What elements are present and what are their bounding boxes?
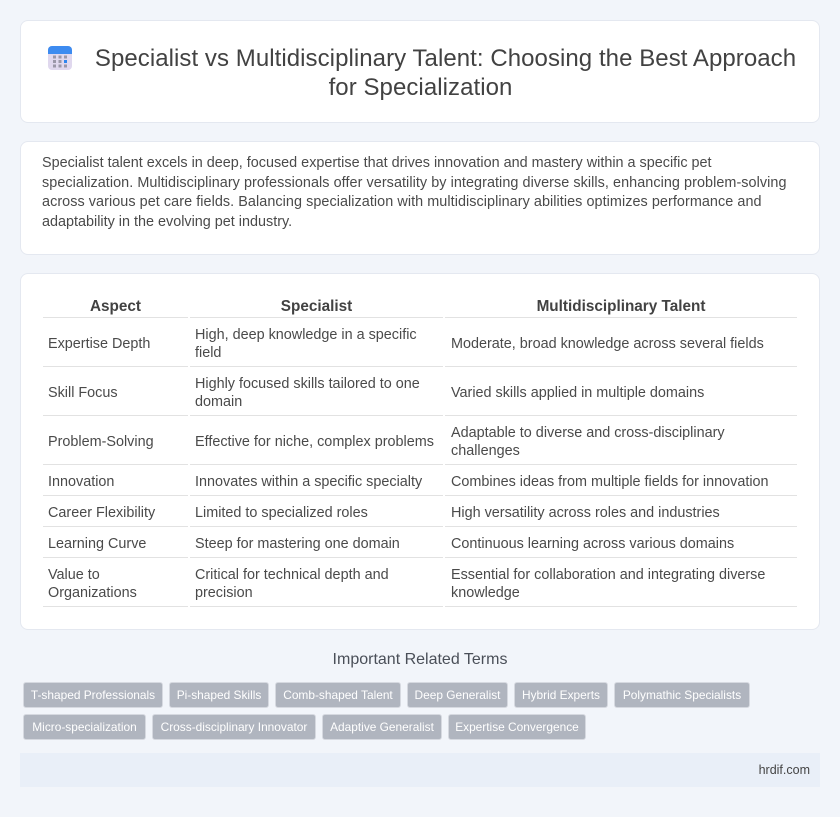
tags: related terms [23, 682, 750, 740]
comparison table: field [195, 345, 221, 361]
comparison table: knowledge [451, 585, 520, 601]
comparison table: Highly focused skills tailored to one [195, 376, 420, 392]
title: Specialist vs Multidisciplinary Talent: Choosing the Best Approach [95, 45, 796, 72]
panel: title card [20, 20, 820, 123]
row: Learning Curve: Learning Curve [48, 536, 146, 552]
row: Value to Organizations: Value to [48, 567, 100, 583]
tag: Cross-disciplinary Innovator [161, 720, 307, 734]
intro text [42, 155, 787, 230]
heading: related terms: Important Related Terms [333, 651, 507, 668]
tag: Adaptive Generalist [330, 720, 434, 734]
comparison table: High versatility across roles and industries [451, 505, 720, 521]
tag [23, 682, 163, 708]
tag [448, 714, 586, 740]
tag: Hybrid Experts [522, 688, 600, 702]
comparison table: challenges [451, 443, 520, 459]
comparison table: Varied skills applied in multiple domains [451, 385, 704, 401]
tag: T-shaped Professionals [31, 688, 155, 702]
intro text: across various pet care fields. Balancing specialization with multidisciplinary abilities optimizes performance and [42, 194, 762, 210]
comparison table: Moderate, broad knowledge across several fields [451, 336, 764, 352]
intro text: Specialist talent excels in deep, focused expertise that drives innovation and mastery within a specific pet [42, 155, 712, 171]
row: Value to Organizations: Organizations [48, 585, 137, 601]
tag: Pi-shaped Skills [177, 688, 261, 702]
icon: calendar [48, 46, 72, 70]
panel: intro text card [20, 141, 820, 255]
tag: Expertise Convergence [455, 720, 579, 734]
row: Problem-Solving: Problem-Solving [48, 434, 154, 450]
intro text: adaptability in the evolving pet industry. [42, 214, 292, 230]
tag: Polymathic Specialists [623, 688, 741, 702]
header: Multidisciplinary Talent: Multidisciplinary Talent [537, 298, 705, 315]
comparison table: domain [195, 394, 242, 410]
row: Skill Focus: Skill Focus [48, 385, 118, 401]
tag [407, 682, 508, 708]
row: Value to Organizations [48, 567, 137, 601]
panel: comparison table card [20, 273, 820, 630]
comparison table: Continuous learning across various domains [451, 536, 734, 552]
comparison table: Effective for niche, complex problems [195, 434, 434, 450]
title: for Specialization [329, 74, 512, 101]
header: Specialist: Specialist [281, 298, 352, 315]
tag: Deep Generalist [415, 688, 500, 702]
footer bar [20, 753, 820, 787]
tag [169, 682, 269, 708]
title [95, 45, 796, 101]
header: Aspect: Aspect [90, 298, 141, 315]
comparison table: Adaptable to diverse and cross-disciplinary [451, 425, 725, 441]
footer source: hrdif.com [759, 763, 810, 777]
comparison table: precision [195, 585, 253, 601]
comparison table: Combines ideas from multiple fields for innovation [451, 474, 769, 490]
comparison table: Essential for collaboration and integrating diverse [451, 567, 765, 583]
comparison table: Steep for mastering one domain [195, 536, 400, 552]
row: Expertise Depth: Expertise Depth [48, 336, 150, 352]
tag: Micro-specialization [32, 720, 137, 734]
tag: Comb-shaped Talent [283, 688, 393, 702]
tag [275, 682, 401, 708]
comparison table: High, deep knowledge in a specific [195, 327, 417, 343]
tag [152, 714, 316, 740]
row: Innovation: Innovation [48, 474, 114, 490]
tag [614, 682, 750, 708]
comparison table: Limited to specialized roles [195, 505, 368, 521]
tag [322, 714, 442, 740]
comparison table: Innovates within a specific specialty [195, 474, 422, 490]
comparison table [43, 298, 797, 607]
comparison table: Critical for technical depth and [195, 567, 389, 583]
intro text: specialization. Multidisciplinary professionals offer versatility by integrating diverse skills, enhancing problem-solving [42, 175, 787, 191]
tag [23, 714, 146, 740]
tag [514, 682, 608, 708]
row: Career Flexibility: Career Flexibility [48, 505, 155, 521]
